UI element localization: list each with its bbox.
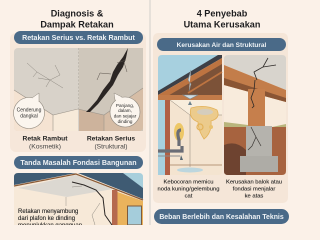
heading pill: retakan serius vs retak rambut: Retakan Serius vs. Retak Rambut (22, 34, 136, 42)
title: diagnosis: Dampak Retakan (40, 20, 114, 30)
text: foundation caption: Retakan menyambung (18, 209, 78, 215)
label: retak rambut: Retak Rambut (23, 136, 68, 142)
label: retakan serius: Retakan Serius (87, 136, 135, 142)
label: retak rambut: (Kosmetik) (29, 144, 61, 150)
caption: beam: fondasi menjalar (233, 186, 275, 192)
text: foundation caption (18, 209, 82, 229)
hairline crack (27, 63, 63, 88)
label: retakan serius: (Struktural) (94, 144, 128, 150)
caption: leak: Kebocoran memicu (164, 180, 213, 186)
text: foundation caption: dari plafon ke dinding (18, 216, 75, 222)
caption: leak: noda kuning/gelembung (158, 186, 219, 192)
heading pill: retakan serius vs retak rambut (14, 31, 143, 44)
heading pill: beban berlebih: Beban Berlebih dan Kesalahan Teknis (159, 214, 284, 221)
title: 4 penyebab (184, 8, 260, 30)
callout: hairline (14, 93, 44, 128)
yellow stain (190, 106, 218, 139)
title: diagnosis (40, 8, 114, 30)
heading pill: kerusakan air dan struktural (157, 38, 286, 51)
illustration: foundation signs (14, 173, 143, 229)
leaking pipe (174, 123, 184, 141)
illustration: hairline vs structural crack (14, 48, 143, 131)
label: retakan serius (87, 136, 135, 150)
callout: structural (110, 93, 140, 127)
label: retak rambut (23, 136, 68, 150)
illustration: beam and foundation crack (224, 55, 286, 175)
callout: structural: dalam, (118, 108, 132, 113)
heading pill: kerusakan air dan struktural: Kerusakan Air dan Struktural (177, 42, 267, 49)
structural crack (86, 48, 128, 112)
heading pill: tanda masalah fondasi: Tanda Masalah Fondasi Bangunan (20, 159, 137, 167)
callout: hairline: Cenderung (17, 108, 42, 114)
panel: water and structural damage (153, 33, 288, 203)
illustration: water leak (158, 55, 222, 175)
caption: beam: ke atas (245, 194, 263, 200)
title: 4 penyebab: Utama Kerusakan (184, 20, 260, 30)
callout: structural: dinding (118, 119, 133, 124)
title: diagnosis: Diagnosis & (51, 8, 104, 18)
callout: structural: dan sejajar (114, 114, 137, 118)
callout: structural: Panjang, (116, 103, 134, 108)
water drip (183, 70, 198, 99)
panel: left comparison (10, 8, 146, 152)
caption: beam (226, 180, 282, 200)
caption: leak (158, 180, 219, 200)
title: 4 penyebab: 4 Penyebab (197, 8, 248, 18)
heading pill: beban berlebih (154, 209, 289, 224)
caption: leak: cat (185, 194, 193, 200)
caption: beam: Kerusakan balok atau (226, 180, 282, 186)
heading pill: tanda masalah fondasi (14, 156, 143, 169)
callout: hairline: dangkal (20, 114, 38, 120)
